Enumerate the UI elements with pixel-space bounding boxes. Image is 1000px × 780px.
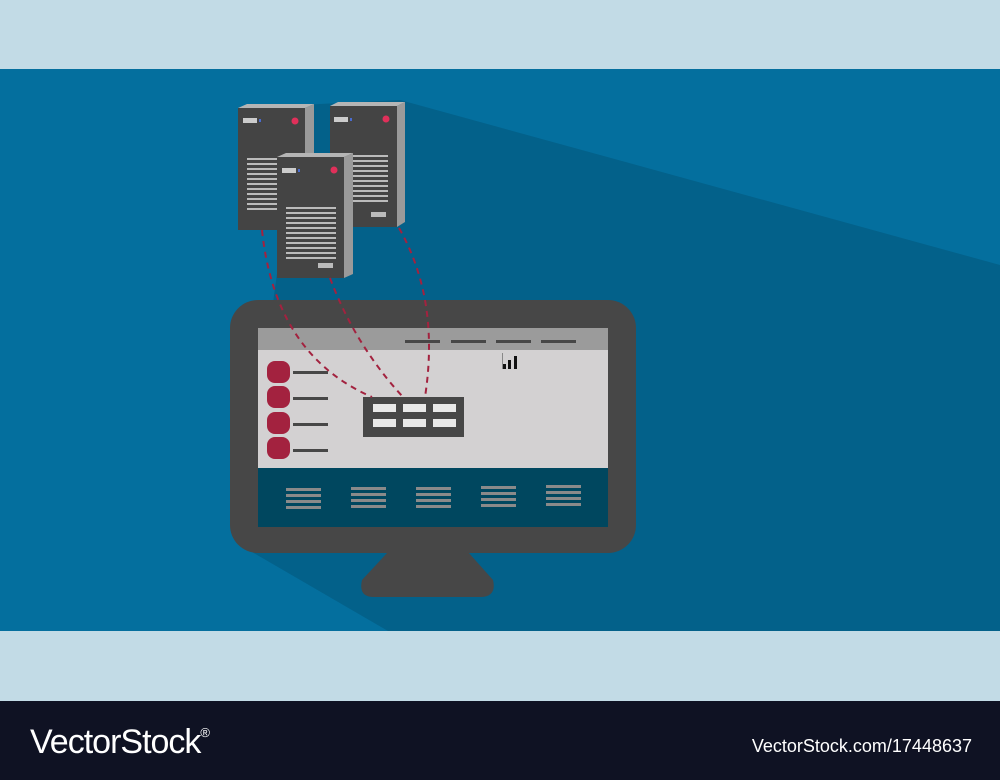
server: front [277, 153, 353, 278]
server: back left [238, 104, 314, 230]
dashed connections [262, 228, 429, 397]
main blue panel [0, 69, 1000, 631]
data grid [363, 397, 464, 437]
top band [0, 0, 1000, 69]
monitor [230, 300, 636, 597]
footer bar: ® [200, 725, 210, 740]
long shadow [240, 100, 1000, 631]
footer bar: VectorStock [30, 723, 200, 761]
footer bar [0, 701, 1000, 780]
footer bar: VectorStock.com/17448637 [752, 736, 972, 756]
server: back right [330, 102, 405, 227]
footer text lines [286, 485, 581, 509]
bottom band [0, 631, 1000, 701]
bar chart icon [502, 353, 517, 369]
stand [361, 552, 494, 597]
sidebar buttons [267, 361, 290, 459]
nav items [405, 340, 576, 343]
